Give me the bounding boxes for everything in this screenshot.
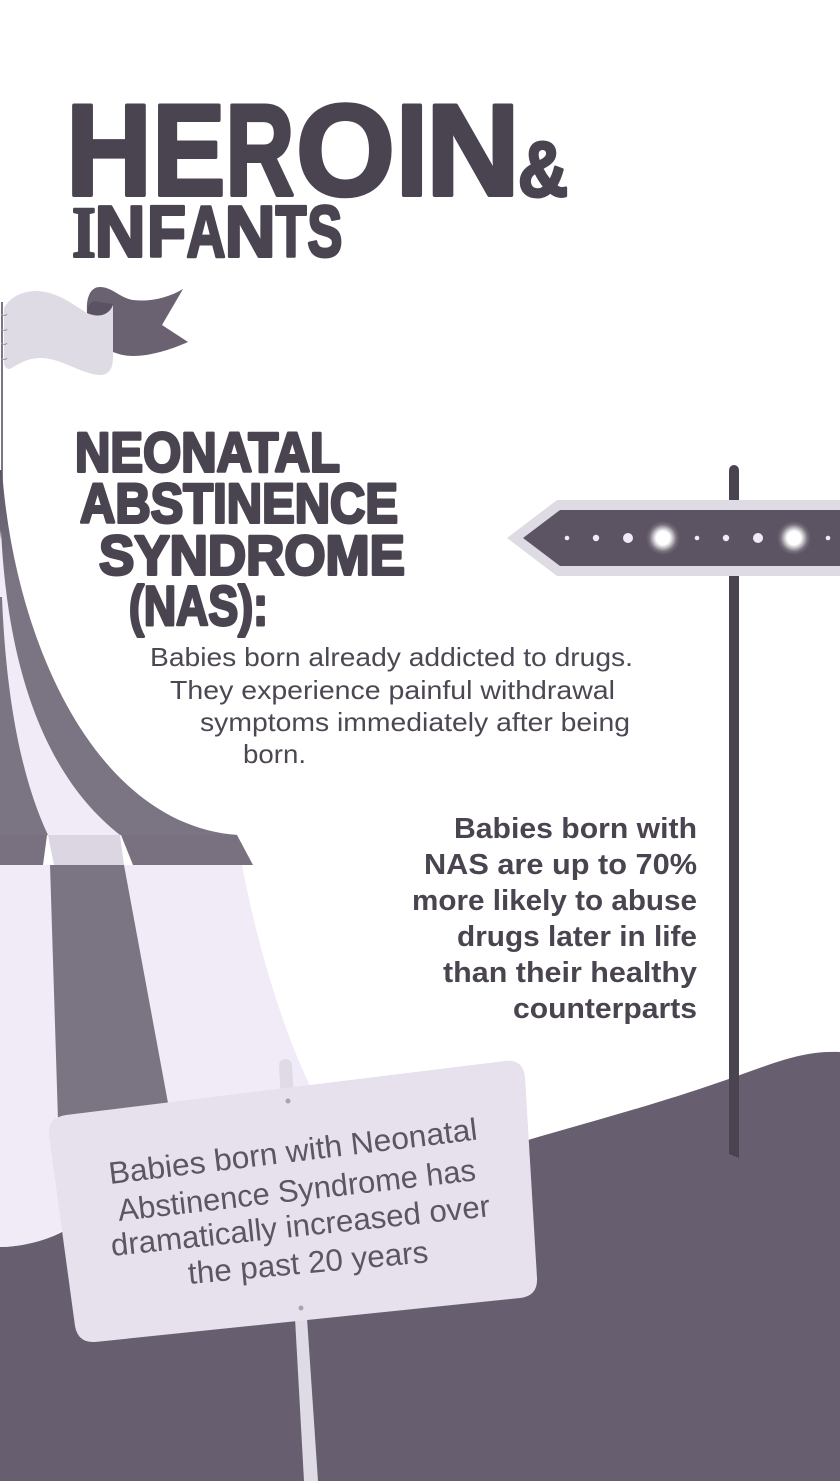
title: heroin and infants: & [518, 125, 568, 213]
title: heroin and infants: F [147, 192, 186, 272]
signpost [507, 465, 840, 1158]
text block: NAS definition: Babies born already addicted to drugs. [150, 642, 633, 672]
text block: NAS definition: born. [243, 739, 306, 769]
arrow sign [507, 500, 840, 576]
placard text [107, 1112, 492, 1291]
heading: neonatal abstinence syndrome: ABSTINENCE [80, 472, 398, 534]
heading: neonatal abstinence syndrome [75, 420, 405, 637]
title: heroin and infants: A [186, 192, 226, 272]
title: heroin and infants: N [426, 77, 520, 223]
heading: neonatal abstinence syndrome: (NAS): [129, 574, 268, 637]
title: heroin and infants: I [72, 192, 96, 272]
icon: flag [1, 287, 188, 540]
callout: 70% statistic: NAS are up to 70% [424, 849, 697, 881]
placard sign [49, 1059, 537, 1481]
hill background [0, 1052, 840, 1481]
callout: 70% statistic: Babies born with [454, 813, 697, 845]
text block: NAS definition [150, 642, 633, 769]
callout: 70% statistic: drugs later in life [457, 921, 697, 953]
title: heroin and infants: N [95, 192, 146, 272]
title: heroin and infants: S [307, 192, 342, 272]
title: heroin and infants: E [152, 77, 225, 223]
title: heroin and infants: I [396, 77, 428, 223]
title: heroin and infants [66, 77, 568, 272]
heading: neonatal abstinence syndrome: NEONATAL [75, 420, 340, 484]
text block: NAS definition: They experience painful withdrawal [170, 675, 615, 705]
callout: 70% statistic [412, 813, 697, 1025]
heading: neonatal abstinence syndrome: SYNDROME [99, 524, 405, 586]
placard text: dramatically increased over [109, 1188, 492, 1263]
title: heroin and infants: N [225, 192, 276, 272]
title: heroin and infants: H [66, 77, 152, 223]
tent [0, 470, 312, 1247]
title: heroin and infants: R [225, 77, 294, 223]
placard text: Babies born with Neonatal [107, 1112, 479, 1191]
callout: 70% statistic: than their healthy [443, 957, 697, 989]
placard text: Abstinence Syndrome has [116, 1152, 477, 1228]
placard text: the past 20 years [186, 1234, 430, 1291]
text block: NAS definition: symptoms immediately after being [200, 707, 630, 737]
title: heroin and infants: O [296, 77, 395, 223]
title: heroin and infants: T [276, 192, 306, 272]
callout: 70% statistic: counterparts [513, 993, 697, 1025]
callout: 70% statistic: more likely to abuse [412, 885, 697, 917]
